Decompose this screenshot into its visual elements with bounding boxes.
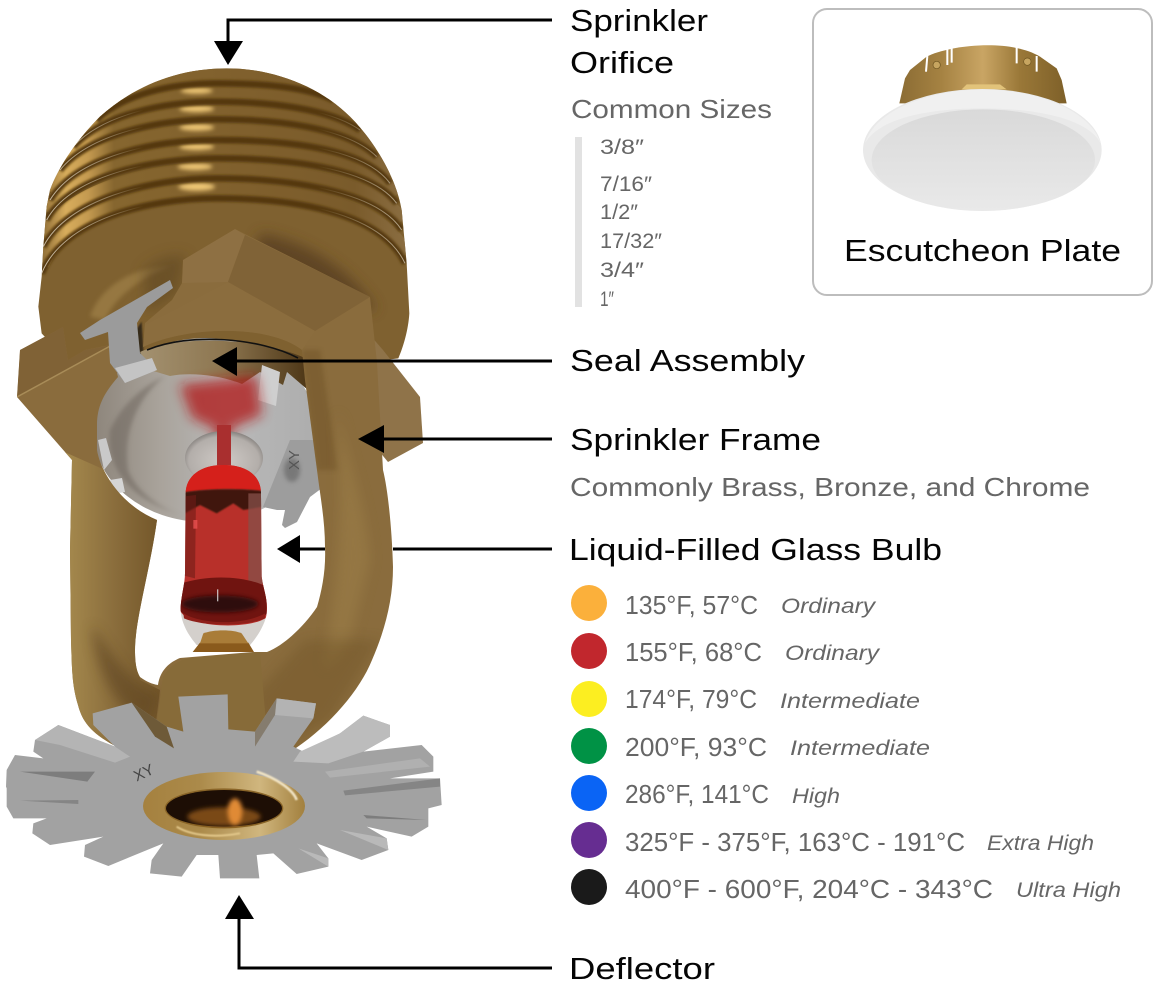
size list: 17/32″ (600, 230, 663, 253)
legend row: orange: Ordinary (781, 595, 877, 618)
threaded body (38, 68, 409, 397)
heading: deflector: Deflector (569, 951, 715, 986)
legend row: purple (571, 822, 1094, 858)
seal assembly disc (93, 338, 322, 528)
liquid-filled glass bulb (180, 425, 267, 652)
legend row: red: Ordinary (785, 642, 881, 665)
spring clip (80, 280, 173, 383)
collar shading (253, 233, 377, 310)
legend row: orange (571, 585, 877, 621)
text: common sizes: Common Sizes (571, 94, 772, 124)
legend row: blue (571, 775, 840, 811)
deflector tine faces (132, 703, 174, 748)
legend row: red: 155°F, 68°C (625, 637, 762, 667)
heading: sprinkler orifice: Sprinkler (570, 3, 708, 38)
heading: glass bulb: Liquid-Filled Glass Bulb (569, 532, 942, 567)
size list: 1/2″ (600, 201, 639, 224)
legend row: green: 200°F, 93°C (625, 732, 767, 762)
glass bulb upper red glow (180, 375, 262, 452)
legend row: black: Ultra High (1016, 879, 1121, 902)
size list: 1″ (600, 288, 614, 311)
heading: seal assembly: Seal Assembly (570, 343, 806, 378)
size list (575, 136, 663, 311)
right flange (370, 335, 423, 462)
frame shading (65, 452, 160, 746)
legend row: yellow: Intermediate (780, 690, 920, 713)
legend row: blue: High (792, 785, 840, 808)
arrow: deflector (225, 895, 552, 968)
legend row: blue: 286°F, 141°C (625, 779, 769, 809)
temperature legend (571, 585, 1121, 905)
panel: escutcheon plate (813, 9, 1152, 295)
sprinkler illustration (6, 68, 442, 878)
legend row: black (571, 869, 1121, 905)
heading: sprinkler orifice: Orifice (570, 45, 674, 80)
arrow: seal assembly (212, 347, 552, 376)
sprinkler frame (17, 229, 393, 770)
size list: 3/8″ (600, 136, 645, 159)
heading: sprinkler frame: Sprinkler Frame (570, 422, 821, 457)
size list: 3/4″ (600, 259, 645, 282)
legend row: black: 400°F - 600°F, 204°C - 343°C (625, 874, 993, 904)
deflector marking: XY (131, 761, 157, 785)
brass grommet (143, 772, 305, 840)
legend row: purple: 325°F - 375°F, 163°C - 191°C (625, 827, 965, 857)
arrow: sprinkler orifice (214, 20, 552, 65)
legend row: yellow: 174°F, 79°C (625, 684, 757, 714)
legend row: red (571, 633, 881, 669)
legend row: orange: 135°F, 57°C (625, 590, 758, 620)
arrow: sprinkler frame (358, 425, 552, 453)
deflector (6, 694, 442, 878)
arrow: glass bulb (277, 535, 552, 563)
icon: escutcheon plate (863, 45, 1102, 211)
heading: sprinkler orifice (570, 3, 708, 80)
label: Escutcheon Plate (844, 233, 1121, 268)
legend row: green: Intermediate (790, 737, 930, 760)
legend row: yellow (571, 681, 920, 717)
text: frame materials: Commonly Brass, Bronze, and Chrome (570, 472, 1090, 502)
size list: 7/16″ (600, 173, 653, 196)
legend row: green (571, 728, 930, 764)
legend row: purple: Extra High (987, 832, 1094, 855)
disc marking: XY (286, 450, 303, 470)
